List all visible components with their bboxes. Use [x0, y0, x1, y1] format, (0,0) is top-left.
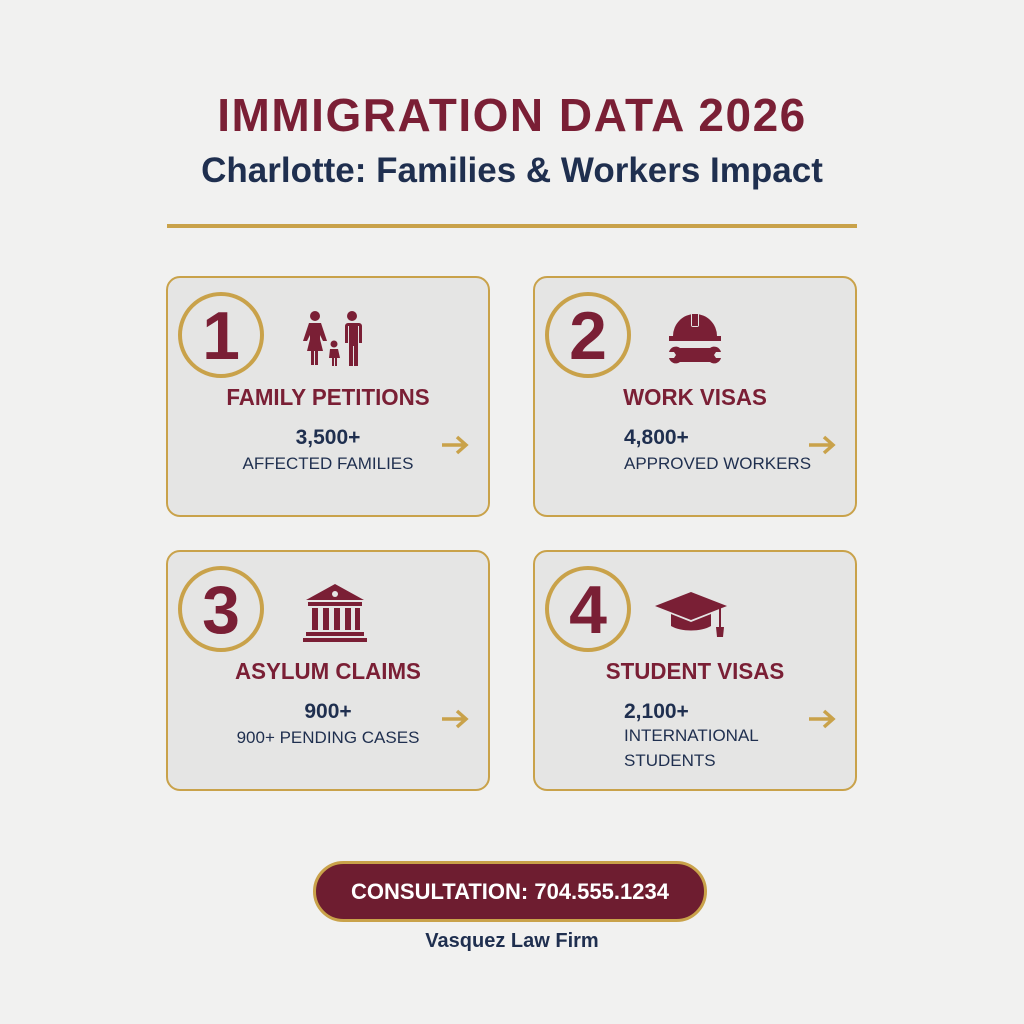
stat label: AFFECTED FAMILIES [242, 454, 413, 473]
icon: graduation cap [655, 592, 727, 637]
arrow [809, 710, 836, 728]
icon: family [303, 311, 362, 366]
number badge 4 [545, 566, 631, 652]
panel: student visas [533, 550, 857, 791]
number badge 1: 1 [202, 298, 240, 374]
heading: FAMILY PETITIONS [226, 384, 430, 410]
subtitle: Charlotte: Families & Workers Impact [201, 151, 823, 190]
number badge 2 [545, 292, 631, 378]
stat: 3,500+ [296, 426, 360, 449]
stat: 900+ [304, 700, 352, 723]
number badge 3 [178, 566, 264, 652]
stat: 4,800+ [624, 426, 689, 449]
number badge 2: 2 [569, 298, 607, 374]
stat label: STUDENTS [624, 751, 716, 770]
heading: STUDENT VISAS [606, 658, 784, 684]
heading: WORK VISAS [623, 384, 767, 410]
number badge 3: 3 [202, 572, 240, 648]
panel: asylum claims [166, 550, 490, 791]
arrow [809, 436, 836, 454]
stat label: 900+ PENDING CASES [237, 728, 419, 747]
stat label: INTERNATIONAL [624, 726, 759, 745]
consultation button [313, 861, 707, 922]
footer firm name: Vasquez Law Firm [425, 930, 599, 952]
number badge 4: 4 [569, 572, 607, 648]
gold divider [167, 224, 857, 228]
stat: 2,100+ [624, 700, 689, 723]
icon: hard hat and wrench [669, 314, 721, 364]
panel: work visas [533, 276, 857, 517]
stat label [624, 726, 759, 770]
consultation button: CONSULTATION: 704.555.1234 [351, 879, 669, 904]
title: IMMIGRATION DATA 2026 [217, 89, 807, 141]
panel: family petitions [166, 276, 490, 517]
arrow [442, 710, 468, 728]
arrow [442, 436, 468, 454]
stat label: APPROVED WORKERS [624, 454, 811, 473]
number badge 1 [178, 292, 264, 378]
heading: ASYLUM CLAIMS [235, 658, 421, 684]
icon: courthouse [303, 584, 367, 642]
